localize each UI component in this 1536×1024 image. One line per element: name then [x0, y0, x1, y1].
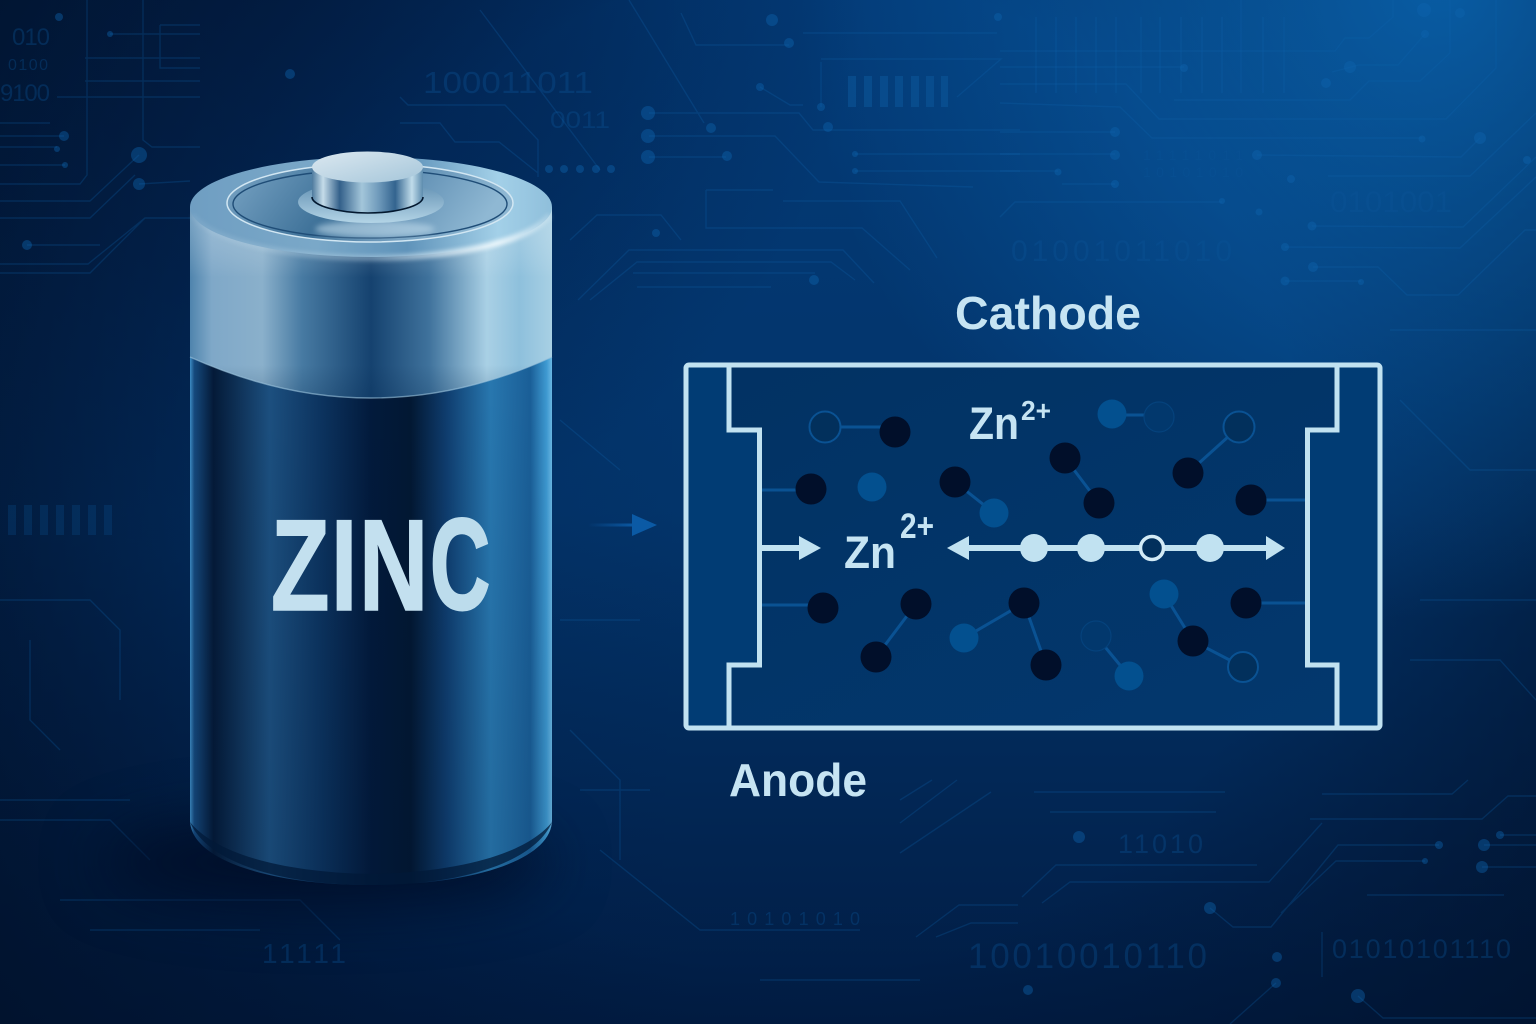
- molecules: dark atoms: [796, 416, 1266, 680]
- cell diagram panel: [686, 365, 1380, 728]
- circuit board background pattern: 10101010: [1143, 164, 1243, 180]
- metal cap band: [190, 207, 552, 398]
- circuit board background pattern: 11111011: [1143, 147, 1243, 163]
- circuit board background pattern: 01010101110: [1332, 934, 1511, 964]
- connector arrow: [588, 514, 657, 536]
- circuit board background pattern: 10010010110: [968, 937, 1207, 976]
- anode outline: [729, 365, 760, 728]
- zinc battery: [190, 152, 552, 885]
- Zn2+ label centre: [844, 507, 934, 578]
- battery label: C: [430, 492, 490, 638]
- anode label: Anode: [729, 754, 867, 806]
- battery label: ZIN: [271, 493, 428, 638]
- molecule connectors: [762, 415, 1305, 676]
- circuit board background pattern: 0101001: [1330, 186, 1452, 219]
- Zn2+ label centre: 2+: [900, 507, 934, 546]
- battery body: [190, 357, 552, 885]
- circuit board background pattern: 100011011: [423, 65, 593, 100]
- Zn2+ label top: 2+: [1021, 395, 1051, 426]
- panel background: [686, 365, 1380, 728]
- top rim: [190, 157, 552, 258]
- Zn2+ label top: Zn: [969, 398, 1019, 449]
- circuit board background pattern: 11010: [1118, 829, 1203, 859]
- cathode plate: [1307, 365, 1380, 728]
- anode plate: [686, 365, 760, 728]
- panel frame: [686, 365, 1380, 728]
- terminal base ring: [298, 181, 444, 223]
- cathode label: Cathode: [955, 287, 1141, 339]
- battery shadow: [100, 820, 550, 904]
- Zn2+ label centre: Zn: [844, 527, 896, 578]
- circuit board background pattern: 9100: [0, 80, 50, 107]
- circuit board background pattern: 0100: [8, 57, 48, 74]
- molecules: blue atoms: [858, 400, 1178, 690]
- circuit board background pattern: 01001011010: [1011, 235, 1232, 268]
- circuit board background pattern: 010: [12, 24, 50, 51]
- anode arrow: [762, 536, 821, 560]
- circuit board background pattern: 0011: [550, 107, 610, 134]
- Zn2+ label top: [969, 395, 1051, 449]
- cathode outline: [1308, 365, 1337, 728]
- recessed top plate: [227, 164, 513, 242]
- positive terminal: [312, 152, 423, 213]
- molecules: hollow atoms: [810, 402, 1258, 682]
- circuit board background pattern: 10101010: [730, 909, 860, 929]
- circuit board background pattern: 11111: [262, 938, 346, 969]
- ion transfer arrow: [947, 534, 1285, 562]
